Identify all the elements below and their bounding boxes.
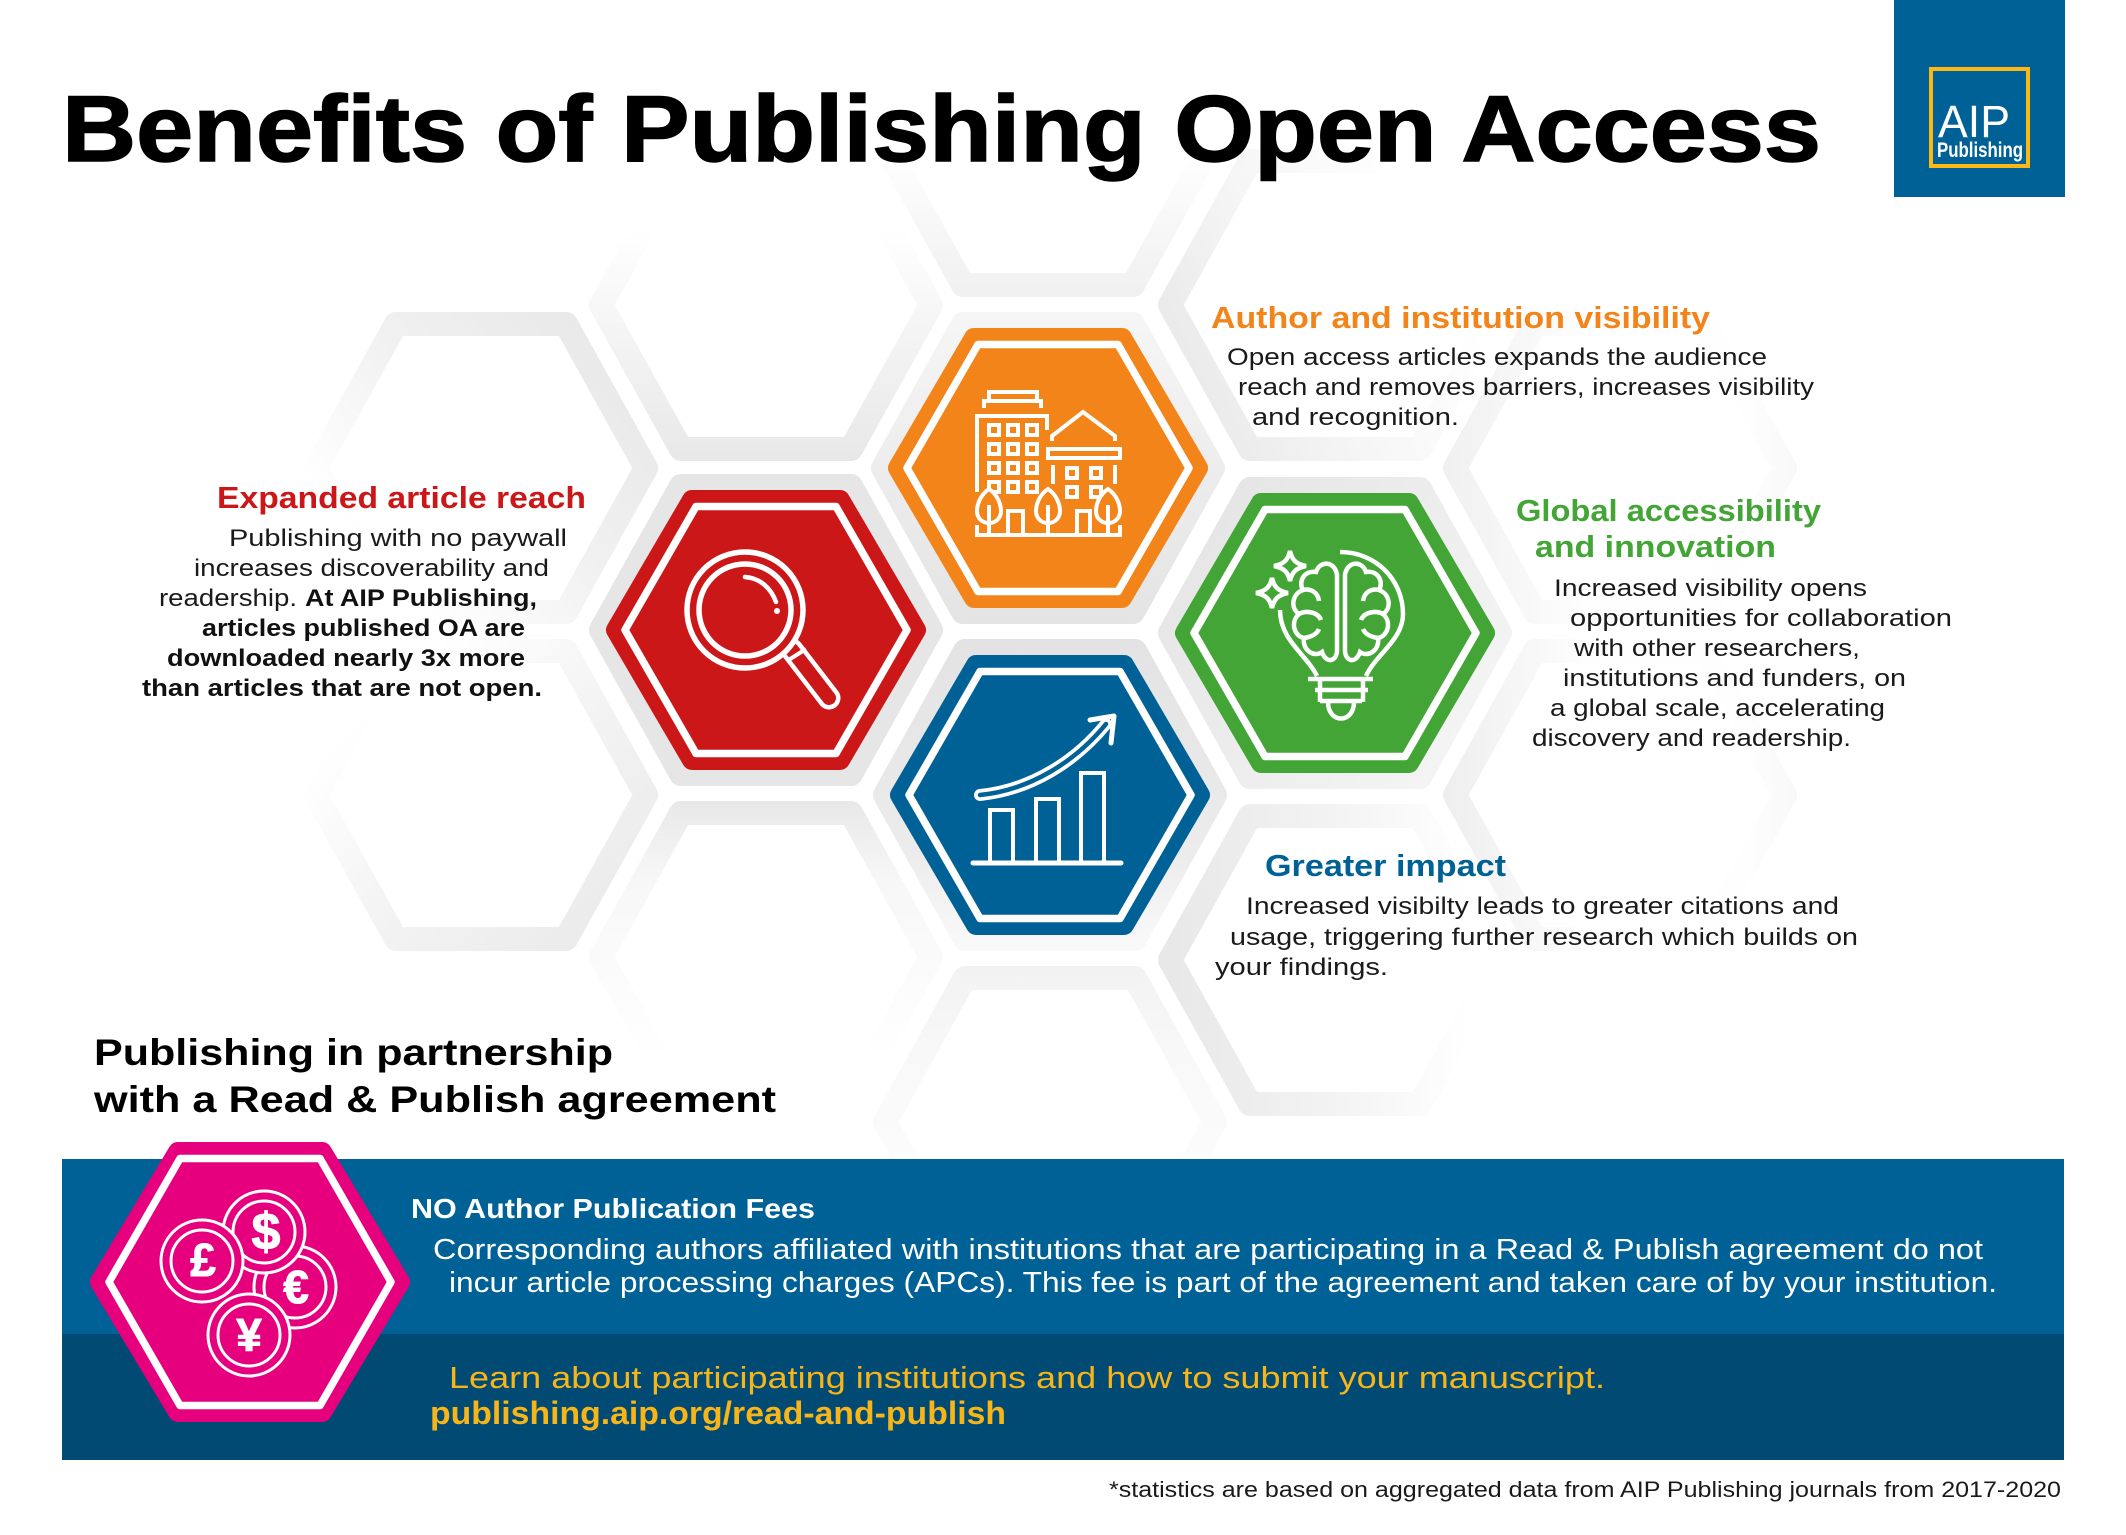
panel: call to action band: [62, 1334, 2064, 1460]
icon: coins: £: [190, 1234, 216, 1286]
text block: greater impact: your findings.: [1215, 954, 1388, 981]
text block: global accessibility and innovation: Increased visibility opens: [1554, 575, 1867, 602]
icon: coins: €: [283, 1261, 309, 1313]
text block: author and institution visibility: reach and removes barriers, increases visibility: [1238, 374, 1814, 401]
text block: global accessibility and innovation: a global scale, accelerating: [1550, 695, 1885, 722]
heading: publishing in partnership: Publishing in partnership: [94, 1032, 613, 1073]
text block: author and institution visibility: and recognition.: [1252, 404, 1459, 431]
panel: blue hexagon, greater impact: [900, 665, 1200, 925]
text block: expanded article reach: Expanded article reach: [217, 480, 586, 515]
text block: expanded article reach: Publishing with no paywall: [229, 525, 567, 552]
text: fees description: Corresponding authors affiliated with institutions that are participating in a Read & Publish agreement do not: [433, 1234, 1983, 1266]
logo: AIP Publishing: [1894, 0, 2065, 197]
text block: global accessibility and innovation: opportunities for collaboration: [1570, 605, 1952, 632]
heading: publishing in partnership: with a Read & Publish agreement: [93, 1079, 776, 1120]
text block: author and institution visibility: Open access articles expands the audience: [1227, 344, 1767, 371]
panel: no author publication fees band: [62, 1159, 2064, 1334]
text: fees description: incur article processing charges (APCs). This fee is part of the agreement and taken care of by your institution.: [449, 1267, 1997, 1299]
text block: expanded article reach: readership.: [159, 585, 297, 612]
text: link: publishing.aip.org/read-and-publish: [430, 1395, 1006, 1431]
text block: expanded article reach: articles published OA are: [202, 615, 525, 642]
icon: magnifying glass: [687, 552, 829, 698]
text block: expanded article reach: increases discoverability and: [194, 555, 549, 582]
text block: global accessibility and innovation: [1516, 493, 1952, 752]
text block: author and institution visibility: Author and institution visibility: [1211, 300, 1711, 335]
text block: global accessibility and innovation: with other researchers,: [1573, 635, 1860, 662]
text block: greater impact: [1215, 848, 1858, 981]
text block: expanded article reach: [142, 480, 586, 702]
panel: green hexagon, global accessibility: [1185, 503, 1485, 763]
text block: author and institution visibility: [1211, 300, 1814, 431]
text: learn about participating institutions: Learn about participating institutions and how to submit your manuscript.: [449, 1360, 1605, 1395]
text block: global accessibility and innovation: discovery and readership.: [1532, 725, 1851, 752]
text block: expanded article reach: than articles that are not open.: [142, 675, 542, 702]
title: Benefits of Publishing Open Access: [62, 76, 1821, 181]
icon: buildings and trees: [975, 392, 1122, 535]
panel: orange hexagon, author and institution visibility: [898, 338, 1198, 598]
background honeycomb: [316, 0, 1785, 1266]
heading: publishing in partnership: [93, 1032, 776, 1120]
text: fees heading: NO Author Publication Fees: [411, 1193, 815, 1224]
text block: global accessibility and innovation: institutions and funders, on: [1563, 665, 1906, 692]
footnote: *statistics are based on aggregated data from AIP Publishing journals from 2017-2020: [1109, 1477, 2061, 1502]
text block: greater impact: usage, triggering further research which builds on: [1230, 924, 1858, 951]
logo: AIP Publishing: Publishing: [1937, 139, 2023, 162]
text block: global accessibility and innovation: and innovation: [1535, 529, 1776, 564]
panel: red hexagon, expanded article reach: [616, 500, 916, 760]
logo: AIP Publishing: AIP: [1938, 96, 2010, 147]
text block: expanded article reach: downloaded nearly 3x more: [167, 645, 525, 672]
text block: global accessibility and innovation: Global accessibility: [1516, 493, 1822, 528]
text block: greater impact: Greater impact: [1265, 848, 1506, 883]
text: fees description: [433, 1234, 1997, 1299]
panel: pink hexagon, coins: [100, 1152, 400, 1412]
icon: coins: [161, 1191, 336, 1376]
icon: lightbulb with brain: [1256, 551, 1403, 718]
text block: expanded article reach: At AIP Publishing,: [305, 585, 537, 612]
icon: coins: ¥: [236, 1309, 262, 1361]
icon: coins: $: [252, 1203, 281, 1261]
icon: rising bar chart with arrow: [973, 716, 1121, 863]
text block: greater impact: Increased visibilty leads to greater citations and: [1246, 893, 1839, 920]
